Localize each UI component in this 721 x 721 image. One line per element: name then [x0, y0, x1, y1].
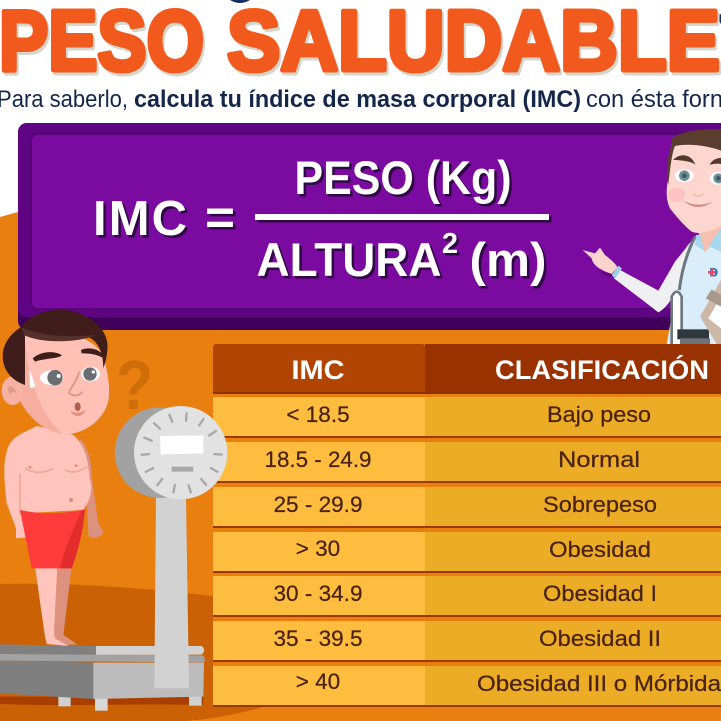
- formula: PESO (Kg): [294, 151, 512, 204]
- row: sobrepeso: Sobrepeso: [543, 492, 657, 517]
- formula: (m): [470, 233, 546, 286]
- row: obesidad III: Obesidad III o Mórbida: [477, 671, 721, 696]
- row: obesidad III: > 40: [296, 669, 340, 694]
- panel: classification table: [213, 344, 721, 707]
- row: sobrepeso: [213, 487, 721, 528]
- row: normal: [213, 442, 721, 483]
- formula: IMC: [96, 194, 190, 248]
- row: normal: Normal: [558, 447, 640, 472]
- row: bajo peso: Bajo peso: [547, 402, 651, 427]
- small navy arc above the title: [230, 0, 721, 24]
- formula: ALTURA: [256, 233, 442, 286]
- row: obesidad: > 30: [296, 536, 340, 561]
- table header: CLASIFICACIÓN: [495, 354, 709, 385]
- formula: =: [208, 194, 238, 248]
- row: normal: 18.5 - 24.9: [264, 447, 372, 472]
- subtitle: Para saberlo,: [0, 86, 128, 113]
- row: obesidad I: Obesidad I: [543, 581, 657, 606]
- subtitle: calcula tu índice de masa corporal (IMC): [134, 86, 581, 113]
- formula: IMC: [93, 192, 187, 246]
- scale: [0, 406, 227, 711]
- formula: ALTURA: [259, 236, 444, 288]
- background: orange shape: [0, 212, 721, 721]
- row: obesidad II: 35 - 39.5: [274, 626, 362, 651]
- subtitle: con ésta forn: [586, 86, 721, 113]
- panel: IMC formula board: [18, 123, 721, 330]
- formula: (m): [472, 236, 549, 288]
- row: obesidad: [213, 532, 721, 573]
- title: [0, 0, 721, 92]
- row: obesidad II: Obesidad II: [539, 626, 661, 651]
- formula: 2: [442, 228, 458, 260]
- formula: =: [205, 191, 235, 245]
- table header: IMC: [292, 355, 344, 385]
- row: sobrepeso: 25 - 29.9: [274, 492, 362, 517]
- man standing on the scale: [2, 310, 109, 646]
- row: obesidad: Obesidad: [549, 537, 651, 562]
- row: obesidad I: 30 - 34.9: [274, 581, 362, 606]
- icon: question mark: ?: [116, 346, 153, 424]
- row: obesidad II: [213, 621, 721, 662]
- table header: [213, 344, 721, 394]
- row: bajo peso: [213, 397, 721, 438]
- doctor illustration: [583, 129, 721, 344]
- doctor illustration: D: [709, 266, 718, 280]
- row: obesidad III: [213, 666, 721, 707]
- row: bajo peso: < 18.5: [286, 402, 350, 427]
- formula: PESO (Kg): [297, 154, 514, 206]
- formula: [93, 151, 552, 288]
- row: obesidad I: [213, 576, 721, 617]
- formula: 2: [444, 230, 461, 262]
- subtitle: [0, 86, 721, 113]
